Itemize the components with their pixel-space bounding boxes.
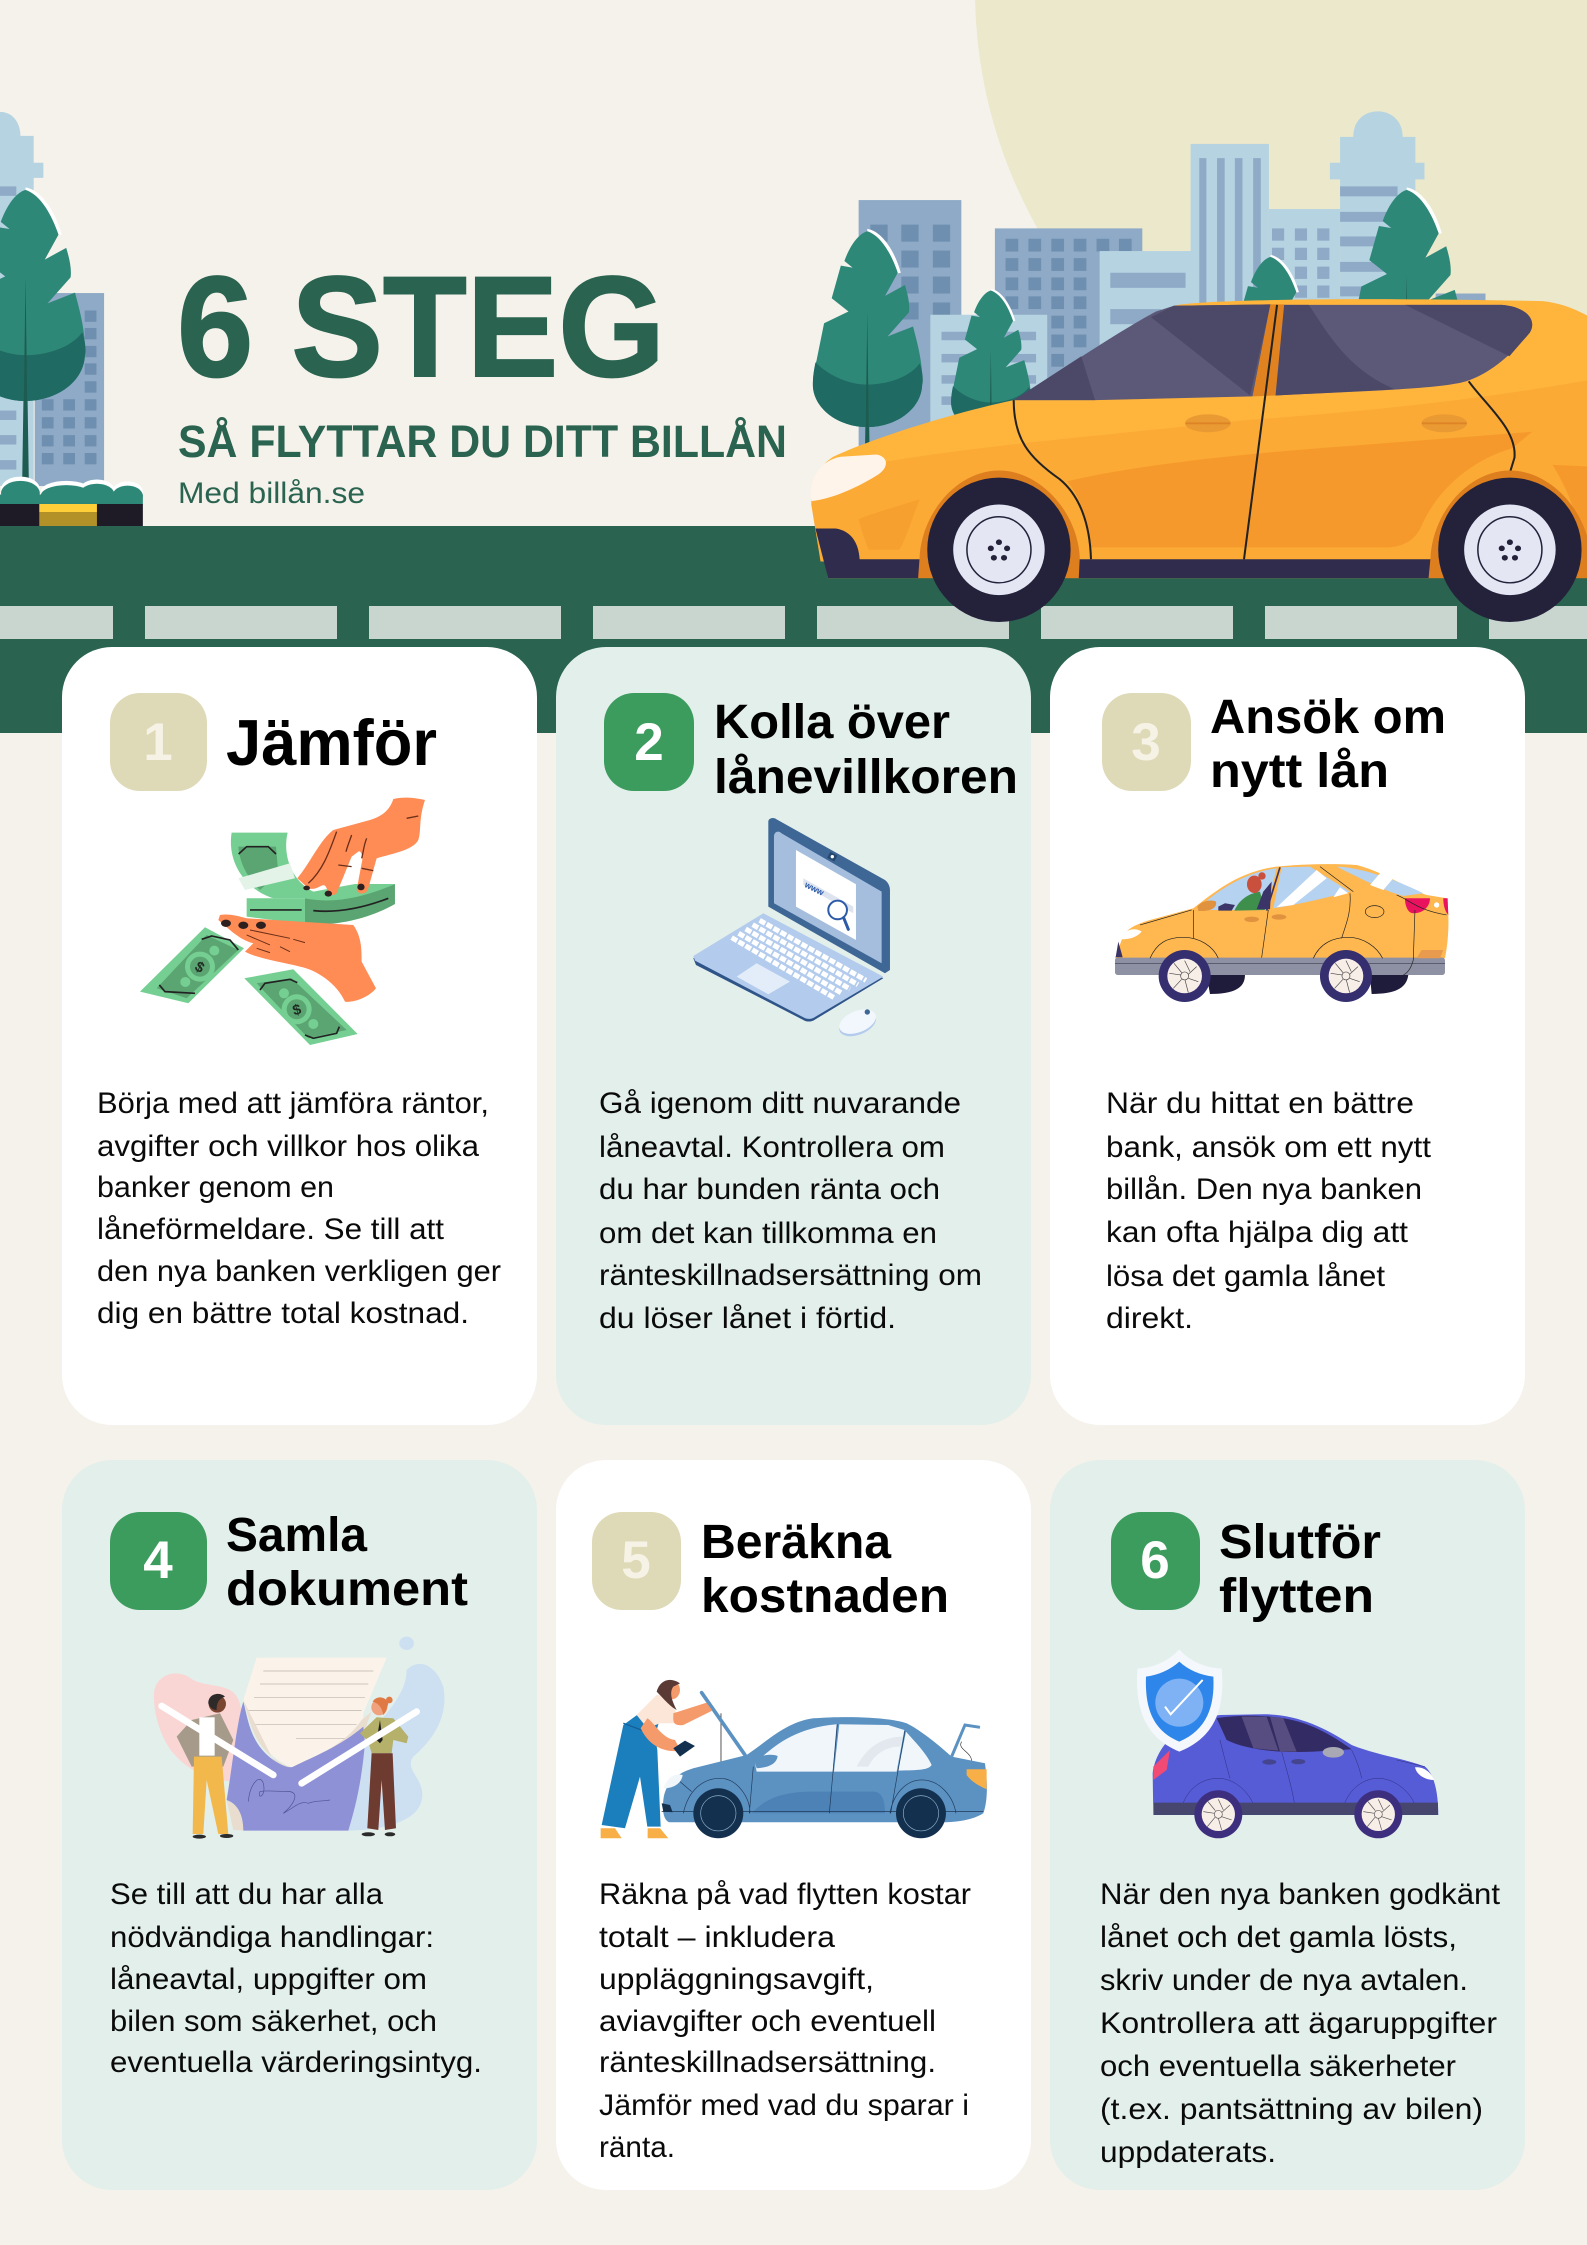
icon: yellow car with driver — [1115, 864, 1448, 1002]
body text: du löser lånet i förtid. — [599, 1302, 896, 1335]
badge 1 — [110, 693, 207, 791]
heading: Beräkna kostnaden: kostnaden — [701, 1570, 949, 1623]
body text — [599, 1087, 982, 1335]
body text: låneavtal. Kontrollera om — [599, 1131, 945, 1164]
heading: Beräkna kostnaden — [701, 1516, 949, 1623]
body text: banker genom en — [97, 1171, 334, 1204]
body text: uppdaterats. — [1100, 2136, 1276, 2169]
heading: Slutför flytten — [1219, 1516, 1381, 1623]
badge 2 — [604, 693, 694, 791]
body text: eventuella värderingsintyg. — [110, 2046, 482, 2079]
body text: Börja med att jämföra räntor, — [97, 1087, 489, 1120]
heading: Kolla över lånevillkoren: lånevillkoren — [714, 751, 1018, 804]
panel: step 1 — [62, 647, 537, 1425]
badge 3 — [1102, 693, 1191, 791]
body text: direkt. — [1106, 1302, 1193, 1335]
heading: Ansök om nytt lån: Ansök om — [1210, 691, 1446, 744]
body text — [97, 1087, 501, 1330]
heading: Slutför flytten: flytten — [1219, 1570, 1374, 1623]
badge 4 — [110, 1512, 207, 1610]
body text: ränteskillnadsersättning om — [599, 1259, 982, 1292]
body text: och eventuella säkerheter — [1100, 2050, 1456, 2083]
body text: lånet och det gamla lösts, — [1100, 1921, 1457, 1954]
byline: Med billån.se — [178, 477, 365, 510]
body text: den nya banken verkligen ger — [97, 1255, 501, 1288]
body text: När du hittat en bättre — [1106, 1087, 1414, 1120]
body text: Se till att du har alla — [110, 1878, 383, 1911]
icon: mechanic at blue car — [601, 1680, 987, 1838]
body text: om det kan tillkomma en — [599, 1217, 937, 1250]
heading: Samla dokument: Samla — [226, 1509, 367, 1562]
badge 6 — [1111, 1512, 1200, 1610]
body text: ränta. — [599, 2131, 675, 2164]
illustration: skyline with tree and curb, left — [0, 112, 143, 529]
subtitle: SÅ FLYTTAR DU DITT BILLÅN — [178, 416, 787, 467]
body text: låneavtal, uppgifter om — [110, 1963, 427, 1996]
heading: Slutför flytten: Slutför — [1219, 1516, 1381, 1569]
panel: step 6 — [1050, 1460, 1525, 2190]
body text: Kontrollera att ägaruppgifter — [1100, 2007, 1497, 2040]
heading: Samla dokument — [226, 1509, 468, 1616]
body text: låneförmeldare. Se till att — [97, 1213, 445, 1246]
heading: Beräkna kostnaden: Beräkna — [701, 1516, 891, 1569]
body text: bank, ansök om ett nytt — [1106, 1131, 1432, 1164]
badge 3: 3 — [1131, 713, 1161, 772]
badge 1: 1 — [143, 713, 173, 772]
illustration: skyline with trees, right — [813, 111, 1485, 530]
panel: step 4 — [62, 1460, 537, 2190]
panel: step 3 — [1050, 647, 1525, 1425]
icon: two people signing a contract — [154, 1637, 444, 1839]
icon: laptop with search — [693, 818, 890, 1041]
body text: du har bunden ränta och — [599, 1173, 940, 1206]
body text: uppläggningsavgift, — [599, 1963, 874, 1996]
body text: lösa det gamla lånet — [1106, 1260, 1386, 1293]
heading: Samla dokument: dokument — [226, 1563, 468, 1616]
badge 5: 5 — [621, 1531, 651, 1590]
road — [0, 526, 1587, 733]
body text — [1100, 1878, 1501, 2169]
badge 6: 6 — [1140, 1531, 1170, 1590]
title: 6 STEG — [177, 248, 665, 407]
body text: skriv under de nya avtalen. — [1100, 1964, 1468, 1997]
icon: hands with money: $ — [192, 959, 207, 977]
body text — [110, 1878, 482, 2079]
body text: aviavgifter och eventuell — [599, 2005, 936, 2038]
body text: avgifter och villkor hos olika — [97, 1130, 479, 1163]
heading: Kolla över lånevillkoren — [714, 696, 1018, 804]
body text: ränteskillnadsersättning. — [599, 2046, 936, 2079]
illustration: large orange car — [811, 299, 1587, 622]
badge 4: 4 — [143, 1531, 173, 1590]
icon: laptop with search: www — [802, 879, 826, 898]
icon: hands with money — [140, 798, 425, 1045]
body text: Jämför med vad du sparar i — [599, 2089, 969, 2122]
heading: Jämför: Jämför — [226, 706, 437, 779]
body text: totalt – inkludera — [599, 1921, 835, 1954]
heading: Kolla över lånevillkoren: Kolla över — [714, 696, 950, 749]
heading: Ansök om nytt lån: nytt lån — [1210, 745, 1389, 798]
icon: blue car with shield — [1137, 1649, 1438, 1838]
body text: Gå igenom ditt nuvarande — [599, 1087, 961, 1120]
panel: step 2 — [556, 647, 1031, 1425]
body text — [599, 1878, 971, 2164]
body text: När den nya banken godkänt — [1100, 1878, 1501, 1911]
body text: Räkna på vad flytten kostar — [599, 1878, 971, 1911]
sun circle — [975, 0, 1587, 476]
body text: billån. Den nya banken — [1106, 1173, 1422, 1206]
body text: dig en bättre total kostnad. — [97, 1297, 469, 1330]
body text: bilen som säkerhet, och — [110, 2005, 437, 2038]
body text: kan ofta hjälpa dig att — [1106, 1216, 1409, 1249]
badge 5 — [592, 1512, 681, 1610]
body text: (t.ex. pantsättning av bilen) — [1100, 2093, 1483, 2126]
body text: nödvändiga handlingar: — [110, 1921, 434, 1954]
heading: Ansök om nytt lån — [1210, 691, 1446, 798]
panel: step 5 — [556, 1460, 1031, 2190]
body text — [1106, 1087, 1432, 1335]
icon: hands with money: $ — [291, 1002, 303, 1019]
badge 2: 2 — [634, 713, 664, 772]
